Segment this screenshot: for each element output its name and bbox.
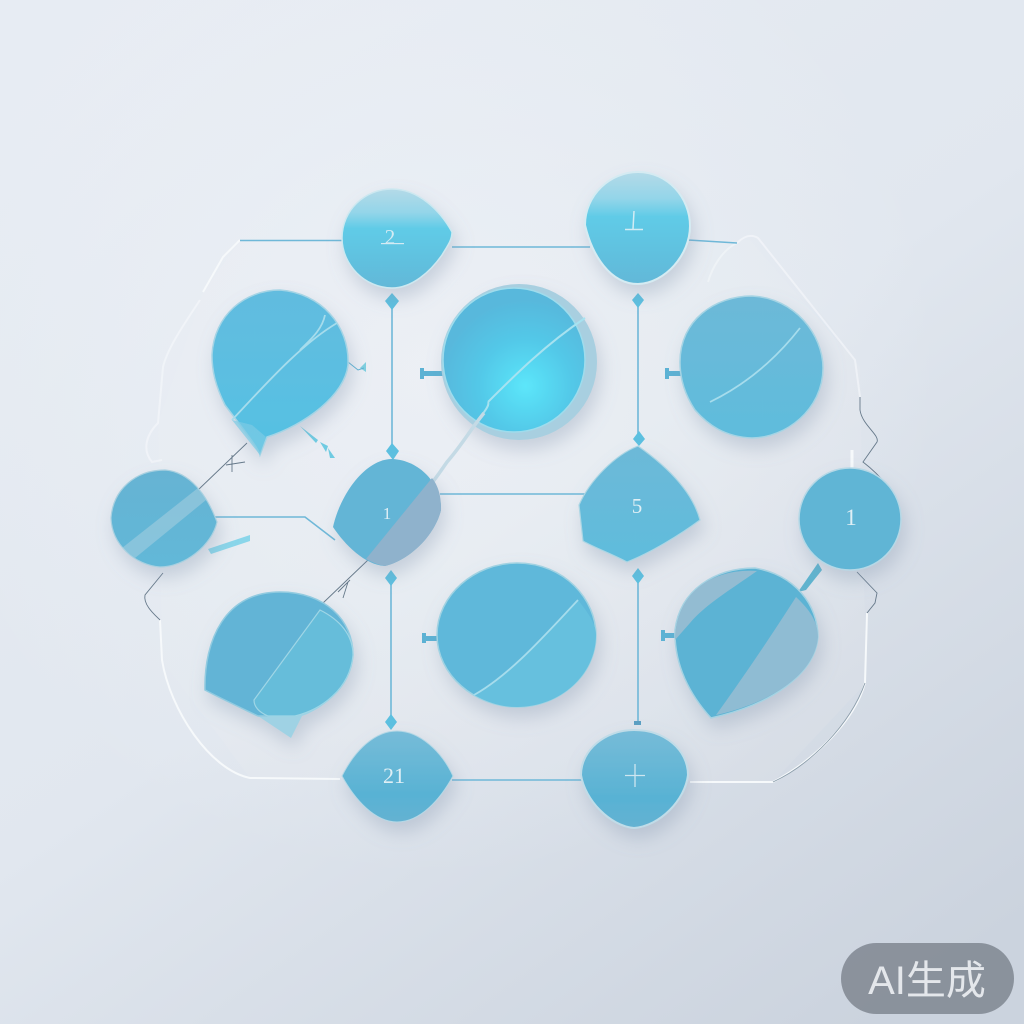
label: 21: 21 bbox=[383, 763, 405, 788]
thin grey wires bbox=[145, 397, 900, 782]
node: bottom 1 bbox=[581, 730, 688, 828]
large node: bottom centre bbox=[437, 563, 596, 707]
large node: top left bbox=[212, 290, 348, 455]
glass ribbon bbox=[431, 413, 484, 484]
node: right 1 bbox=[799, 468, 901, 570]
large node: top right bbox=[680, 296, 823, 438]
label: 5: 5 bbox=[632, 494, 642, 518]
node: top 2 bbox=[342, 189, 452, 288]
small pin marks bbox=[208, 362, 822, 643]
node: left bbox=[111, 470, 217, 567]
large node: top centre bbox=[441, 284, 597, 440]
diamond markers bbox=[385, 293, 645, 730]
glass backing region bbox=[158, 240, 866, 782]
label: 1 bbox=[625, 764, 645, 787]
node: centre 1 bbox=[333, 459, 441, 566]
node: centre 5 bbox=[579, 446, 700, 562]
large node: bottom left bbox=[205, 592, 353, 738]
label: 2: 2 bbox=[385, 225, 395, 249]
node: top 1 bbox=[585, 172, 690, 284]
large node: bottom right bbox=[675, 568, 818, 718]
outer glass outline bbox=[146, 236, 867, 782]
badge: AI generated bbox=[841, 943, 1014, 1014]
label: 1: 1 bbox=[845, 505, 857, 530]
label: 1 bbox=[625, 211, 643, 230]
label: 1: 1 bbox=[383, 504, 391, 523]
badge: AI generated: AI生成 bbox=[868, 959, 986, 1003]
connector lines bbox=[215, 240, 737, 780]
node: bottom 21 bbox=[342, 731, 453, 822]
